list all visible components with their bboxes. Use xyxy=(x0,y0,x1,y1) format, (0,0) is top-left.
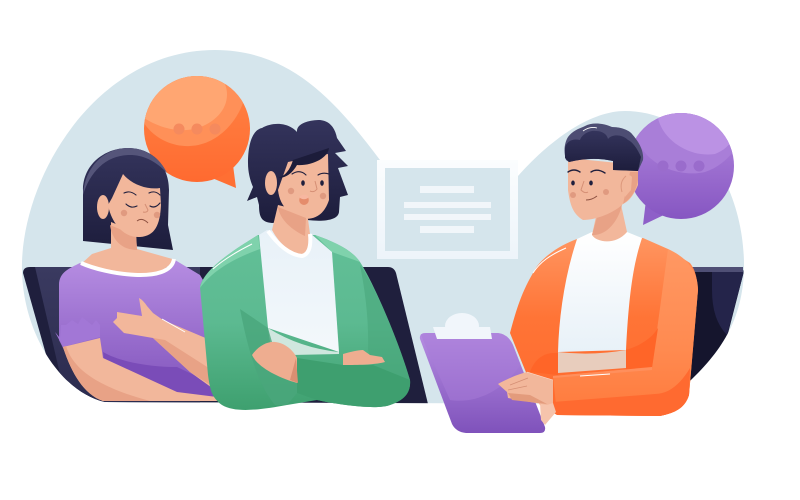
eyes xyxy=(571,180,575,186)
smile xyxy=(586,196,597,200)
neck xyxy=(592,200,627,241)
clip xyxy=(445,313,479,339)
hand right xyxy=(343,350,385,365)
eyebrows xyxy=(568,170,605,173)
shirt xyxy=(259,230,339,352)
hand holding clipboard xyxy=(498,372,556,425)
speech bubble: purple xyxy=(634,113,734,225)
face xyxy=(108,174,161,237)
jacket highlights xyxy=(533,248,610,376)
hand left xyxy=(252,342,297,383)
ear xyxy=(621,175,632,197)
hair xyxy=(247,120,348,223)
neck xyxy=(272,205,310,254)
ear xyxy=(265,171,277,195)
sleeve frill xyxy=(55,317,100,347)
bangs xyxy=(278,148,329,178)
face xyxy=(568,158,638,220)
eyes xyxy=(301,180,305,186)
speech bubble: orange xyxy=(144,76,250,188)
arm fold xyxy=(240,309,297,405)
cheeks xyxy=(121,210,127,216)
person: woman left xyxy=(55,148,225,401)
shirt xyxy=(59,260,215,401)
collar xyxy=(268,231,310,256)
eyes and mouth xyxy=(124,192,160,207)
person: man with orange jacket xyxy=(510,123,698,416)
jacket xyxy=(510,238,698,416)
cheeks xyxy=(570,192,576,198)
arm xyxy=(63,338,225,401)
ear xyxy=(97,195,109,219)
jacket xyxy=(200,235,410,410)
sleeve shade xyxy=(553,368,690,416)
right side shade xyxy=(360,265,410,380)
forearm and hand xyxy=(113,298,215,390)
shirt shadow xyxy=(558,350,626,373)
hair xyxy=(565,123,643,171)
mouth xyxy=(299,195,309,205)
face xyxy=(278,154,329,219)
jacket light panel xyxy=(553,249,698,416)
neck and chest xyxy=(80,222,176,280)
jacket highlights xyxy=(213,244,252,269)
background blob xyxy=(22,50,744,404)
shoulder highlight xyxy=(200,235,260,288)
cheeks xyxy=(288,188,294,194)
right bench seat xyxy=(690,267,744,381)
hair back xyxy=(83,148,173,250)
clipboard xyxy=(420,313,545,433)
left bench seat xyxy=(23,267,428,404)
shirt xyxy=(558,232,642,352)
person: man with green jacket xyxy=(200,120,410,410)
collar xyxy=(81,259,174,275)
illustration: group discussion xyxy=(22,50,744,433)
panel: presentation board xyxy=(377,160,518,259)
